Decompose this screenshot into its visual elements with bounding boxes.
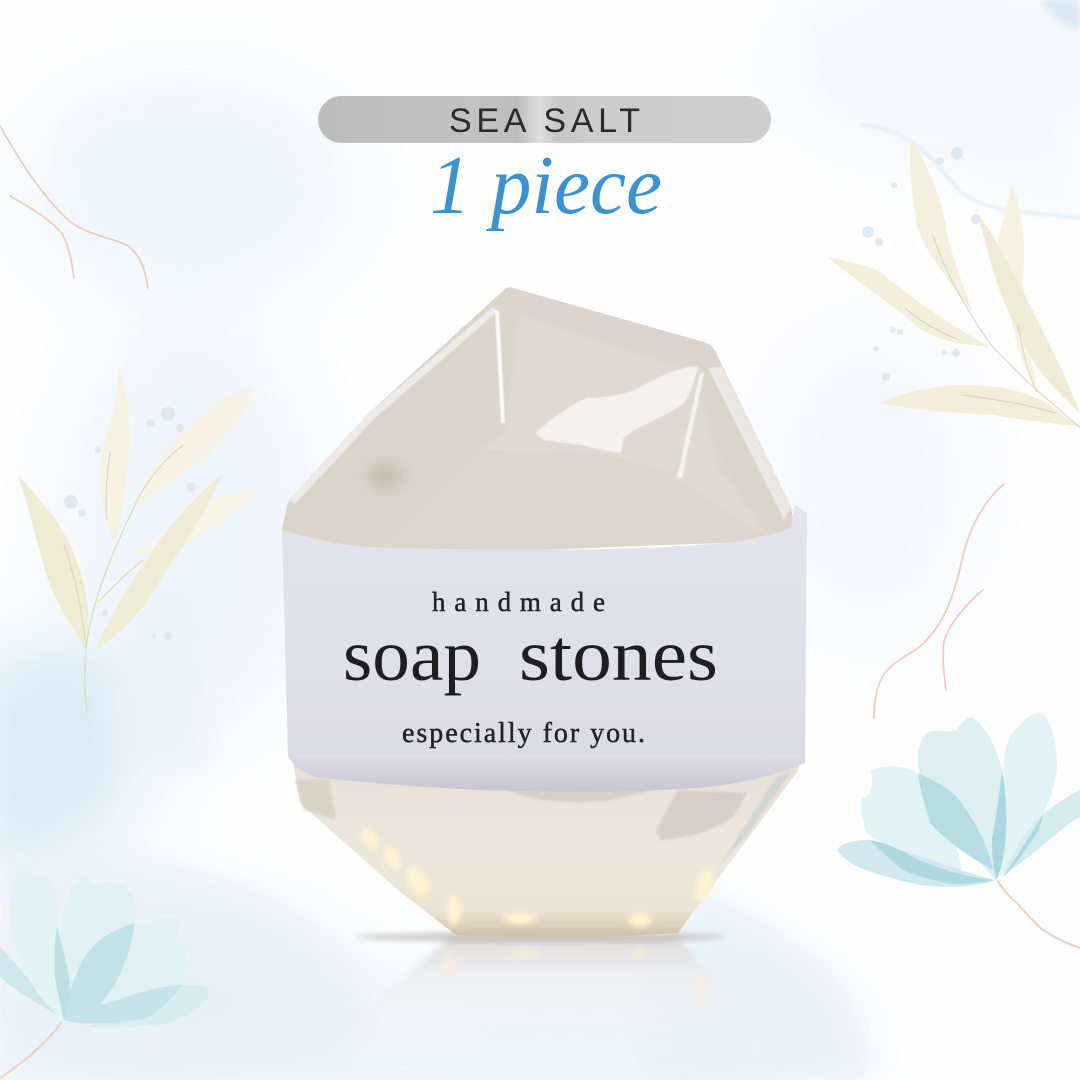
heading pill: SEA SALT: SEA SALT — [449, 102, 640, 140]
inner petal — [870, 840, 995, 884]
label text: handmade: handmade — [432, 587, 605, 617]
subheading: 1 piece: 1 piece — [430, 139, 662, 232]
inner petal — [63, 923, 135, 1020]
decorative branch: top-left copper lines — [0, 126, 148, 288]
decorative branch: right copper lines — [874, 484, 1004, 718]
leaf — [880, 385, 1080, 427]
illustration: left leaf sprig — [18, 368, 260, 713]
lower facet — [384, 450, 769, 548]
petal — [1000, 713, 1057, 877]
leaf — [133, 387, 255, 507]
label text: soap stones: stones — [519, 615, 718, 696]
gloss highlight — [535, 367, 698, 453]
leaf — [978, 213, 1080, 413]
petal — [1003, 790, 1080, 875]
pale right edge — [708, 367, 791, 519]
inner face — [385, 315, 770, 548]
leaf — [18, 475, 88, 650]
label text: soap stones: soap — [343, 615, 481, 696]
inner petal — [918, 773, 993, 870]
illustration: speckles near sprigs — [64, 147, 981, 640]
leaf — [95, 475, 222, 650]
label text: especially for you.: especially for you. — [402, 718, 645, 749]
pale left edge — [289, 307, 497, 504]
product: soap stone — [282, 287, 807, 937]
illustration: right leaf sprig — [828, 138, 1080, 427]
leaf — [997, 185, 1038, 390]
illustration: right blue flower — [837, 713, 1080, 948]
stem — [905, 233, 1080, 427]
petal — [61, 877, 136, 1000]
soap reflection — [320, 938, 780, 1075]
petal — [861, 766, 963, 875]
petal — [10, 870, 67, 1017]
illustration: bottom-left blue flower — [0, 870, 208, 1078]
soap ground shadow — [355, 932, 725, 942]
low petal — [837, 840, 995, 887]
leaf — [828, 257, 990, 347]
paper label band — [282, 505, 807, 792]
inner petal — [55, 927, 70, 1018]
leaf — [910, 138, 973, 313]
leaf — [100, 368, 130, 542]
inner petal — [992, 770, 1006, 880]
petal — [93, 919, 185, 1010]
soap top section — [282, 287, 797, 560]
glossy streak — [677, 373, 704, 478]
leaf — [133, 490, 260, 557]
petal — [0, 947, 60, 1017]
inner petal — [1003, 815, 1043, 877]
stem — [997, 880, 1080, 948]
stem — [0, 1022, 62, 1078]
heading pill: SEA SALT — [318, 96, 771, 143]
petal — [918, 718, 1002, 880]
low outer petal — [83, 985, 208, 1028]
soap bottom section — [293, 760, 800, 937]
top edge band — [496, 287, 718, 367]
stem — [64, 445, 183, 713]
inner petal — [63, 985, 182, 1023]
glossy streak — [495, 310, 505, 423]
